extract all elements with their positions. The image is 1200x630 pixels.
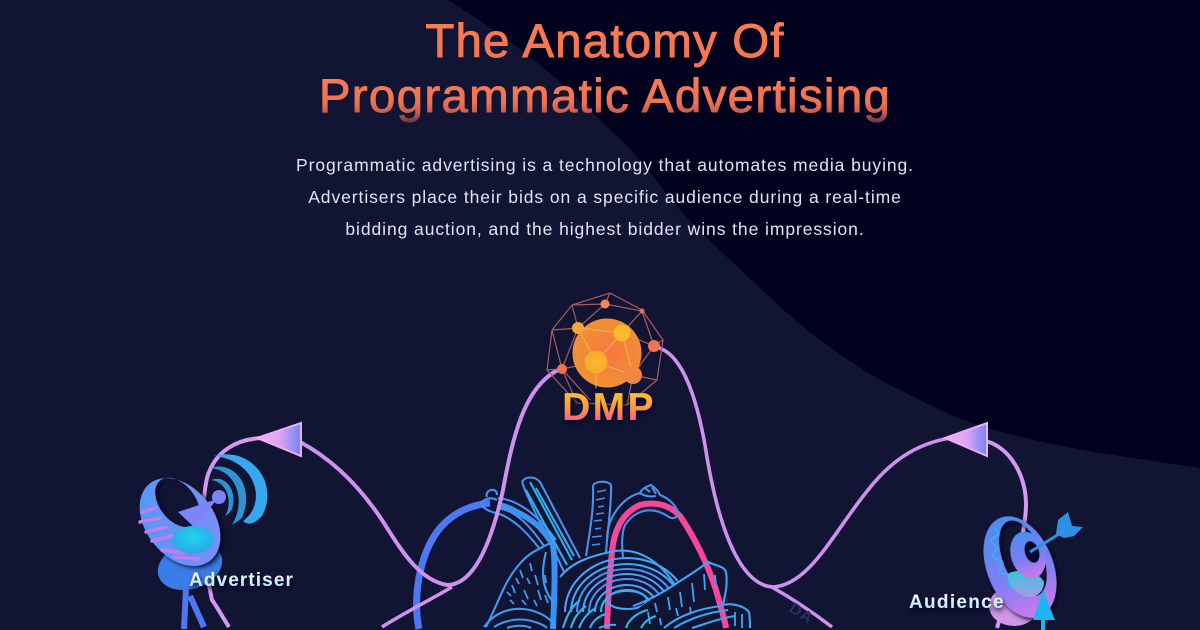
dish base (152, 534, 228, 598)
audience dish ring (970, 505, 1070, 629)
arrow: left triangle (257, 423, 301, 456)
icon: advertiser satellite dish (123, 454, 267, 629)
Audience label: Audience (909, 592, 1005, 613)
connector: purple line left arrow to heart (300, 369, 560, 585)
DMP nodes (557, 300, 660, 384)
heart: center pipe (586, 482, 611, 556)
connector: purple advertiser loop (203, 438, 262, 627)
heart: upper left pipe (522, 478, 580, 572)
dish cone (178, 499, 217, 528)
connector: purple audience loop (986, 441, 1026, 533)
DMP wireframe (547, 293, 663, 405)
heart: right chamber (633, 562, 750, 628)
audience pink base (989, 586, 1039, 626)
title (319, 15, 891, 123)
intro text block: Programmatic advertising is a technology that automates media buying. (296, 155, 914, 175)
connector: purple DMP to right arrow (656, 347, 950, 587)
intro text block: bidding auction, and the highest bidder wins the impression. (345, 219, 865, 239)
heart: vein collar and left vessel (481, 490, 556, 548)
connector: pink artery line (607, 503, 726, 629)
intro text block (296, 155, 914, 239)
dish stripes (140, 508, 198, 559)
icon: DMP network sphere (547, 293, 663, 405)
heart: main dome contours (560, 551, 689, 612)
title: Programmatic Advertising (319, 70, 891, 123)
heart: aortic arch (607, 485, 678, 557)
dish hub (172, 526, 214, 554)
connector: purple lower right branch (770, 586, 832, 627)
audience dish pattern (990, 528, 1020, 590)
connector: purple lower left branch (382, 587, 452, 627)
heart: left chamber (484, 542, 556, 628)
DMP label: DMP (562, 386, 656, 429)
dish bowl (123, 462, 237, 582)
DMP core sphere (572, 318, 642, 388)
title: The Anatomy Of (425, 15, 785, 68)
heart illustration (481, 478, 750, 628)
connector: thick blue heart vessel (498, 506, 555, 629)
arrow: right triangle (945, 423, 987, 456)
audience target (1004, 527, 1052, 583)
audience hub (1007, 571, 1044, 597)
faint DA label: DA (786, 600, 816, 628)
dark curved background shape (448, 0, 1200, 468)
icon: audience target dish (970, 505, 1083, 630)
audience arrow (1030, 512, 1083, 552)
signal ball (212, 490, 226, 504)
Advertiser label: Advertiser (189, 570, 294, 591)
dish legs (184, 588, 204, 629)
intro text block: Advertisers place their bids on a specific audience during a real-time (308, 187, 902, 207)
connector: blue artery line (417, 503, 490, 629)
signal waves (210, 454, 267, 525)
audience cyan pointer (1033, 590, 1055, 620)
heart: lower contours (563, 600, 656, 628)
